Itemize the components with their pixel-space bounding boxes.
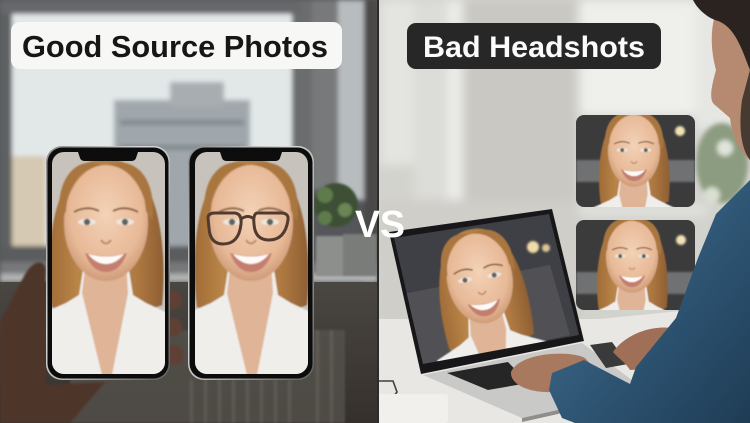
heading: bad headshots xyxy=(407,23,661,69)
heading: good source photos xyxy=(11,22,342,69)
dark lower wall xyxy=(0,282,378,423)
head and hair xyxy=(711,20,750,160)
panel: bad headshots scene xyxy=(378,0,750,423)
heading: bad headshots: Bad Headshots xyxy=(423,31,645,64)
laptop xyxy=(380,205,636,422)
thumbnail: headshot one xyxy=(576,115,695,207)
center divider xyxy=(377,0,379,423)
radiator xyxy=(70,330,345,423)
phone: portrait with glasses xyxy=(188,146,314,380)
laptop base xyxy=(423,343,636,418)
blue shirt xyxy=(549,180,750,423)
keyboard xyxy=(447,362,518,390)
icon: glasses xyxy=(208,213,288,244)
hands xyxy=(511,354,596,392)
window with blurred city view xyxy=(0,0,378,290)
vs label: VS xyxy=(355,204,405,246)
icon: potted plant xyxy=(314,183,377,276)
white desk xyxy=(378,310,690,423)
man typing xyxy=(511,0,750,423)
heading: good source photos: Good Source Photos xyxy=(22,29,328,64)
thumbnail: headshot two xyxy=(576,220,695,310)
blurred room background xyxy=(380,0,731,214)
icon: blurred plant xyxy=(696,123,748,203)
icon: eyeglasses on desk xyxy=(379,380,398,394)
panel: good source photos scene xyxy=(0,0,378,423)
icon: hand holding phone xyxy=(0,262,184,423)
phone: plain portrait xyxy=(46,146,170,380)
